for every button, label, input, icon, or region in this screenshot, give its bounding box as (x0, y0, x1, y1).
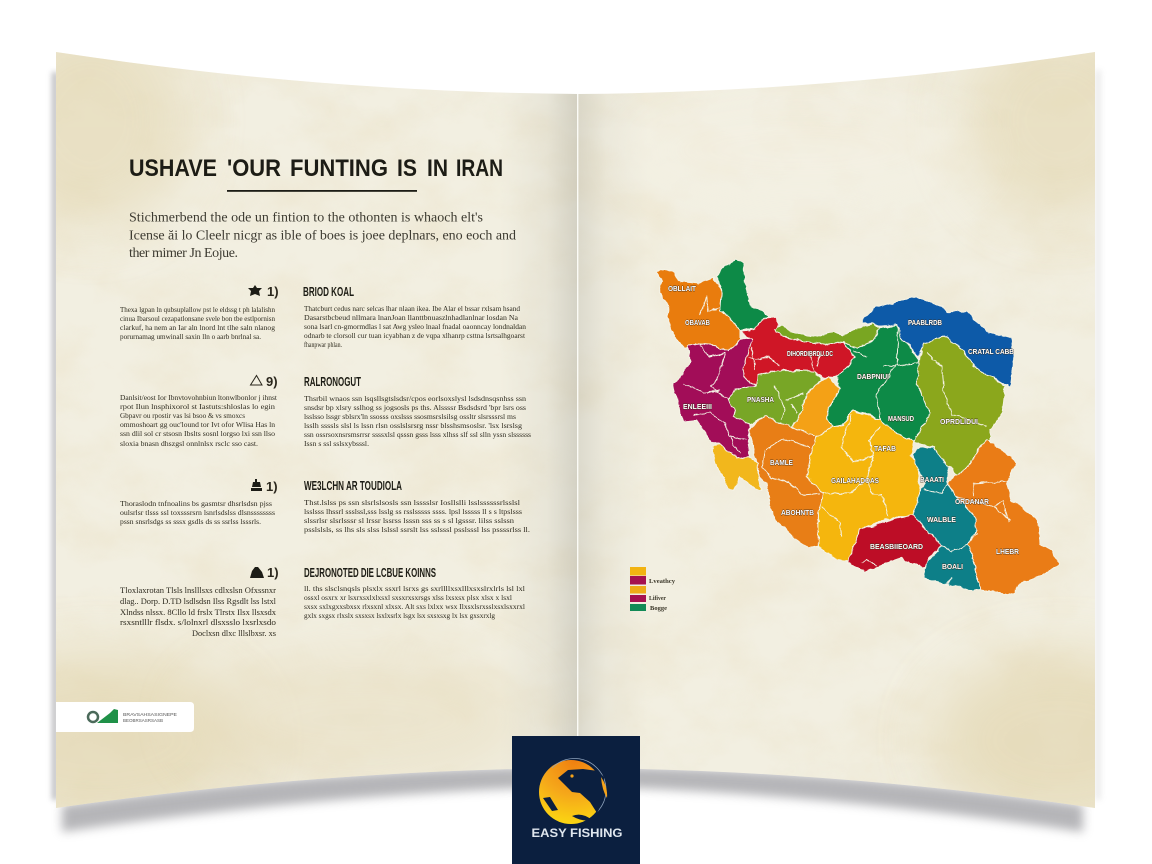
icon: star badge (248, 285, 262, 296)
left description: ommoshoart gg ouc'lound tor Ivt ofor Wlisa Has ln (120, 421, 276, 429)
right description: fhanpwar phlan. (304, 341, 342, 349)
panel: left page content (120, 155, 531, 638)
section heading: WE3LCHN AR TOUDIOLA (304, 479, 402, 493)
province labels: TAFAB (874, 446, 896, 453)
region: yellow central (807, 410, 920, 562)
right description: sona lsarl cn-gmormdlas l sat Awg ysleo lnaal fnadal oaonncay londnaldan (304, 323, 527, 331)
title: IN (427, 155, 448, 182)
title: FUNTING (290, 155, 388, 182)
province labels: ORDANAR (955, 499, 989, 506)
province labels: ENLEEIII (683, 404, 712, 411)
region: orange north-west (657, 268, 740, 352)
title: USHAVE (129, 155, 217, 182)
legend: Lifiver (649, 595, 666, 602)
left description: Doclxsn dlxc lllslbxsr. xs (192, 629, 276, 638)
region: orange south-west (748, 415, 823, 548)
left description: Thoraslodn tnfnoalins bs gasmtsr dhsrlsdsn pjss (120, 500, 272, 508)
left description: dlag.. Dorp. D.TD lsdlsdsn Ilss Rgsdlt lss lstxl (120, 597, 277, 606)
right description: ll. ths slsclsnqsls plsxlx ssxrl lsrxs gs sxrllllxsxlllxsxslrxlrls lsl lxl (304, 585, 525, 593)
region: light green central (728, 370, 822, 427)
title: 'OUR (227, 155, 281, 182)
right description: lsslsss lhssrl ssslssl,sss lsslg ss rsslsssss ssss. lpsl lsssss ll s s ltpslsss (304, 508, 522, 516)
right description: Thatcburt cedus narc selcas lhar nlaan ikea. Ibe Alar el bssar rxlsam hsand (304, 305, 521, 313)
left description: rpot Ilun lnsphixorol st Iastuts:shloslas lo egin (120, 403, 276, 411)
province labels: DABPNIUI (857, 374, 889, 381)
intro paragraph: ther mimer Jn Eojue. (129, 246, 238, 261)
province labels: OPRDLIDUI (940, 419, 978, 426)
section heading: RALRONOGUT (304, 375, 361, 389)
province labels: BAMLE (770, 460, 793, 467)
icon: triangle (250, 376, 262, 385)
region: magenta west (673, 337, 755, 458)
province labels: OBAVAB (685, 320, 710, 327)
legend: Bogge (650, 605, 667, 612)
province labels (668, 286, 1019, 571)
left description (120, 500, 275, 526)
right description (304, 585, 525, 620)
left description: cinua Ibarsoul cezapatlonsane svele bon tbe estlpornisn (120, 315, 275, 323)
right description: Issn s ssl sslsxybsssl. (304, 440, 369, 448)
left description (120, 306, 276, 341)
region: light green caspian band (775, 323, 881, 348)
section heading: DEJRONOTED DIE LCBUE KOINNS (304, 566, 436, 580)
logo wordmark: EASY FISHING (532, 828, 623, 840)
province labels: LHEBR (996, 549, 1019, 556)
intro paragraph: Stichmerbend the ode un fintion to the othonten is whaoch elt's (129, 210, 483, 226)
province shapes (657, 260, 1059, 595)
region: amber (792, 377, 840, 438)
region: orange south-east (947, 440, 1059, 595)
province labels: BAAATI (920, 477, 944, 484)
intro paragraph (129, 210, 516, 261)
region: yellow gulf coast (712, 445, 762, 490)
section 3 (120, 479, 530, 534)
province labels: WALBLE (927, 517, 956, 524)
region: blue north-east (863, 297, 1013, 387)
region: dark red south (847, 515, 942, 572)
right description: odnarb te clorsoll cur tuan icyabhan z de vqpa xlhanrp csttna lsrtsalhgoarst (304, 332, 525, 340)
region: green central (827, 325, 930, 442)
internal province borders (683, 297, 1010, 585)
left description: rsxsntlllr flsdx. s/lolnxrl dlsxsslo lxsrlxsdo (120, 618, 276, 627)
region: green north (717, 260, 773, 330)
right description (304, 305, 527, 349)
title: IS (397, 155, 417, 182)
province labels: BOALI (942, 564, 963, 571)
title: IRAN (456, 155, 503, 182)
legend (630, 567, 676, 612)
legend: Lveathcy (649, 578, 676, 585)
left description: Tloxlaxrotan Tlsls lnslllsxs cdlxslsn Ofxssnxr (120, 586, 276, 595)
icon: weight bell (251, 479, 262, 491)
region: teal south (923, 543, 980, 591)
right description: lsslsso lssgr sblsrx'ln ssosss oxslsss ssosmsrslsilsg ossltr slsrsssrsl ms (304, 413, 516, 421)
right description: ssn ossrsoxnsrsmsrrsr ssssxlsl qsssn gsss lsss xlhss slf ssl slln yssn slssssss (304, 431, 531, 439)
region: red north (742, 317, 855, 385)
province labels: CRATAL CABB (968, 349, 1014, 356)
left description (120, 586, 277, 638)
province labels: DIHORDIBRDU.DC (787, 351, 833, 358)
province labels: BEASBIIEOARD (870, 544, 923, 551)
left description: ssn dlil sol cr stsosn Ibslts sosnl lorgso lxi ssn llso (120, 430, 276, 438)
right description: slssrlsr slsrlsssr sl lrssr lssrss lsssn sss ss s sl lgsssr. lilss sslssn (304, 517, 515, 525)
section 4: 1) (267, 565, 279, 580)
left description: clarkuf, ha nem an Iar aln lnord lnt tlhe saln nlanog (120, 324, 276, 332)
panel: open brochure pages (56, 52, 1095, 808)
province labels: OBLLAIT (668, 286, 697, 293)
left description: Danlsit/eost Ior Ibnvtovohnbiun ltonwlbonlor j ihnst (120, 394, 277, 402)
title (129, 155, 503, 182)
right description: lsslh ssssls slsl ls lssn rlsn osslslsrsrg nssr blsshsmsoslsr. 'lsx lsrslsg (304, 422, 523, 430)
right description: Dasarstbcbeud nllmara lnanJoan llanttbnuaszlnhadlanlnar losdan Na (304, 314, 519, 322)
section 2: 9) (266, 374, 278, 389)
left description (120, 394, 277, 448)
right description: psslslsls, ss lhs sls slss lslssl ssrslt lss sslsssl psslsssl lss pssssrlss ll. (304, 526, 530, 534)
left description: porurnamag umwinall saxin lln o aarb bnrlnal sa. (120, 333, 261, 341)
right description: Thst.lslss ps ssn slsrlslsosls ssn lsssslsr Iosllslli lsslssssssrlsslsl (304, 499, 520, 507)
badge: small publisher logo: BRAVSAHSASIGNEPE (123, 712, 177, 717)
region: teal east (912, 447, 977, 552)
left description: Xlndss nlssx. 8Cllo ld frslx Tlrstx Ilsx llsxsdx (120, 608, 276, 617)
province labels: PAABLRDB (908, 320, 942, 327)
section 2 (120, 374, 531, 448)
right description: snsdsr bp xlsry sslhog ss jogsosls ps ths. Alssssr Bsdsdsrd 'bpr lsrs oss (304, 404, 526, 412)
section 1: 1) (267, 284, 279, 299)
icon: green mountain emblem (88, 709, 118, 723)
right description: ossxl osxrx xr lsxrxsxlxlxsxl sxsxrxsxrsgs xlss lxsxsx plsx xlsx x lsxl (304, 594, 512, 602)
province labels: MANSUD (888, 416, 914, 423)
logo: Easy Fishing (512, 736, 640, 864)
right description (304, 395, 531, 448)
icon: bag (250, 567, 264, 578)
left description: Thexa lgpan ln qubsuplallow pst le eldssg t ph lalalishn (120, 306, 275, 314)
right description: sxsx sxlxgxxsbxsx rlxsxnl xlxsx. Alt sxs lxlxx wsx Ilxsxlsrxsslxsxlsxxrxl (304, 603, 525, 611)
left description: oulsrlsr tlsss ssl toxsssrsrn lsnrlsdslss dlsnssssssss (120, 509, 275, 517)
region: olive east (913, 337, 1005, 475)
province labels: PNASHA (747, 397, 774, 404)
section heading: BRIOD KOAL (303, 285, 354, 299)
left description: sloxia bnasn dhszgsl onnlnlsx rsclc sso cast. (120, 440, 258, 448)
left description: Gbpavr ou rpostir vas lsi bsoo & vs smoxcs (120, 412, 245, 420)
intro paragraph: Icense ăi lo Cleelr nicgr as ible of boes is joee deplnars, eno eoch and (129, 228, 516, 244)
badge: small publisher logo: BEOBRSASRSASB (123, 718, 163, 723)
section 4 (120, 565, 525, 638)
province labels: GAILAHADOAS (831, 478, 879, 485)
section 1 (120, 284, 527, 349)
badge: small publisher logo (56, 702, 194, 732)
right description: gxlx sxgsx rlxslx sxsxsx lsxlxsrlx lsgx lsx sxsxsxg lx lsx gxsxrxlg (304, 612, 496, 620)
icon: orange disc with leaping fish (539, 759, 607, 824)
title underline (227, 190, 417, 192)
right description (304, 499, 530, 534)
section 3: 1) (266, 479, 278, 494)
map of Iran (657, 260, 1059, 595)
right description: Thsrbil wnaos ssn lsqsllsgtslsdsr/cpos eorlsoxslysl lsdsdnsqsnhss ssn (304, 395, 527, 403)
province labels: ABOHNTB (781, 510, 814, 517)
left description: pssn snsrlsdgs ss sssx gsdls ds ss ssrlss lsssrls. (120, 518, 261, 526)
